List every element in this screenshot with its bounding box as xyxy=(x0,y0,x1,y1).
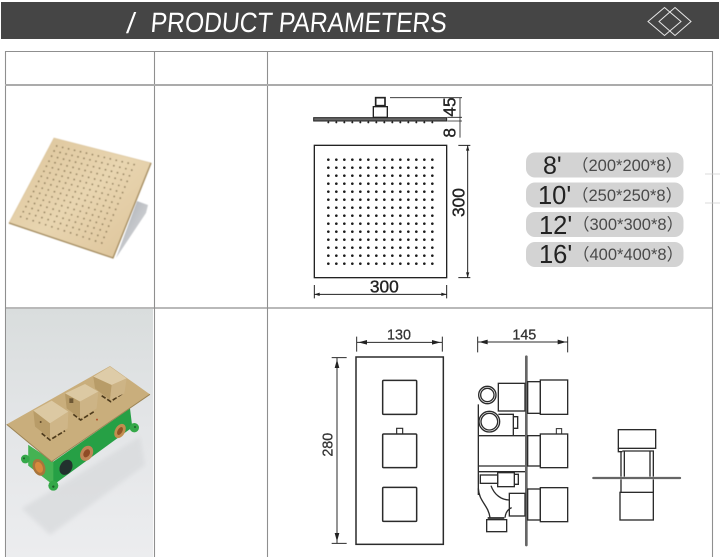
size pill: 16 xyxy=(526,241,684,269)
side height dimensions: 45 xyxy=(440,97,460,117)
height dimension 300: 300 xyxy=(448,188,468,217)
height dimension 280: 280 xyxy=(321,433,337,457)
mounting flanges xyxy=(21,423,139,491)
knob 2 xyxy=(65,384,98,420)
depth dimension 145 xyxy=(478,327,568,352)
size pill: 10: （250*250*8） xyxy=(572,186,682,205)
front knobs xyxy=(383,380,417,521)
head shadow xyxy=(116,201,148,258)
valve body xyxy=(478,383,525,532)
side knobs xyxy=(528,380,568,522)
head nozzle dots xyxy=(21,146,140,245)
width dimension 130: 130 xyxy=(387,327,411,343)
green box xyxy=(21,408,139,491)
size pill: 12: （300*300*8） xyxy=(573,215,683,234)
top view plate xyxy=(314,145,447,278)
side view xyxy=(314,98,447,122)
drawing: valve front view xyxy=(321,327,443,544)
side height dimensions: 8 xyxy=(440,128,460,138)
side plate xyxy=(522,357,530,545)
photo: gold square shower head xyxy=(9,138,151,258)
gold plate xyxy=(7,366,150,462)
size pill: 8 xyxy=(526,152,684,180)
width dimension 300: 300 xyxy=(370,276,399,296)
photo: thermostatic valve xyxy=(6,309,153,557)
size pill: 12 xyxy=(526,212,684,240)
size pill: 10 xyxy=(526,182,684,210)
knob 3 xyxy=(93,367,127,402)
head plate xyxy=(9,138,151,258)
size pill: 8: （200*200*8） xyxy=(572,156,682,175)
top view nozzle grid xyxy=(328,160,433,264)
drawing: valve side view xyxy=(478,327,680,545)
size pill: 12: 12' xyxy=(539,212,572,240)
size pill: 16: 16' xyxy=(539,241,572,269)
height dimension 280 xyxy=(321,358,347,543)
size pill: 10: 10' xyxy=(538,182,571,210)
title: / xyxy=(125,8,138,40)
width dimension 300 xyxy=(314,276,447,298)
knob 1 xyxy=(33,401,68,440)
icon: double diamond xyxy=(648,8,691,36)
header bar xyxy=(1,2,719,40)
size pill: 16: （400*400*8） xyxy=(573,245,683,264)
size pill: 8: 8' xyxy=(543,152,562,180)
width dimension 130 xyxy=(357,327,442,352)
end view xyxy=(593,430,680,520)
size list xyxy=(526,152,684,269)
ports xyxy=(30,457,48,478)
title: PRODUCT PARAMETERS xyxy=(149,7,448,38)
photo background xyxy=(6,309,153,557)
height dimension 300 xyxy=(448,145,470,278)
floor reflection xyxy=(22,437,145,535)
side height dimensions xyxy=(390,97,462,138)
depth dimension 145: 145 xyxy=(512,327,536,343)
front plate xyxy=(356,357,443,544)
drawing: shower head dimensions xyxy=(314,97,470,298)
